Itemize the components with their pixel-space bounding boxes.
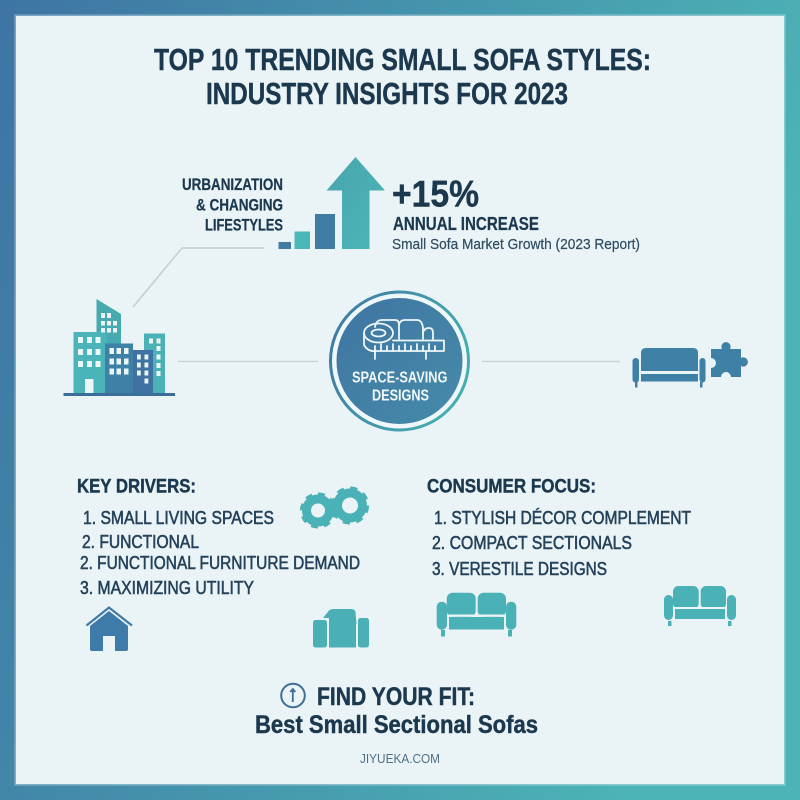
list: consumer focus: 3. VERESTILE DESIGNS: [432, 559, 607, 579]
growth bar chart with arrow: [278, 157, 385, 249]
section: consumer focus: [427, 476, 691, 579]
list: key drivers: 2. FUNCTIONAL: [82, 532, 199, 552]
heading: key drivers: KEY DRIVERS:: [77, 476, 196, 498]
urbanization label: LIFESTYLES: [205, 216, 283, 234]
list: consumer focus: [432, 508, 691, 579]
list: consumer focus: 2. COMPACT SECTIONALS: [432, 533, 632, 553]
icon: teal sofa large: [437, 593, 516, 636]
heading: consumer focus: CONSUMER FOCUS:: [427, 476, 596, 498]
icon: house: [86, 608, 132, 651]
icon: city buildings: [64, 299, 175, 396]
call to action: [255, 683, 538, 739]
urbanization label: & CHANGING: [196, 196, 283, 214]
section: key drivers: [77, 476, 360, 598]
market growth statistic: [392, 174, 640, 253]
central badge: space-saving designs: SPACE-SAVING: [352, 370, 448, 386]
right connector: [482, 360, 620, 362]
market growth statistic: ANNUAL INCREASE: [393, 213, 539, 234]
call to action: FIND YOUR FIT:: [317, 683, 475, 711]
urbanization label: [182, 176, 283, 234]
left connector: [178, 360, 318, 362]
title: [154, 42, 651, 111]
market growth statistic: Small Sofa Market Growth (2023 Report): [392, 237, 640, 253]
list: key drivers: 1. SMALL LIVING SPACES: [83, 508, 274, 528]
central badge: space-saving designs: [330, 292, 468, 430]
central badge: space-saving designs: DESIGNS: [372, 388, 429, 404]
call to action: Best Small Sectional Sofas: [255, 711, 538, 739]
connector line from city to growth chart: [133, 248, 264, 307]
urbanization label: URBANIZATION: [182, 176, 283, 194]
icon: teal sofa small: [664, 586, 736, 626]
title: TOP 10 TRENDING SMALL SOFA STYLES:: [154, 42, 651, 77]
list: key drivers: 2. FUNCTIONAL FURNITURE DEMAND: [80, 553, 360, 573]
list: key drivers: [80, 508, 360, 598]
market growth statistic: +15%: [392, 174, 479, 214]
icon: sofa with tape measure: [364, 320, 444, 359]
title: INDUSTRY INSIGHTS FOR 2023: [206, 76, 568, 111]
icon: armchair: [313, 609, 369, 648]
icon: sofa and puzzle piece: [632, 342, 748, 388]
icon: gears: [302, 488, 367, 527]
list: consumer focus: 1. STYLISH DÉCOR COMPLEMENT: [434, 508, 691, 528]
list: key drivers: 3. MAXIMIZING UTILITY: [80, 578, 254, 598]
website footer: JIYUEKA.COM: [360, 751, 440, 766]
icon: circled arrow: [281, 684, 305, 707]
